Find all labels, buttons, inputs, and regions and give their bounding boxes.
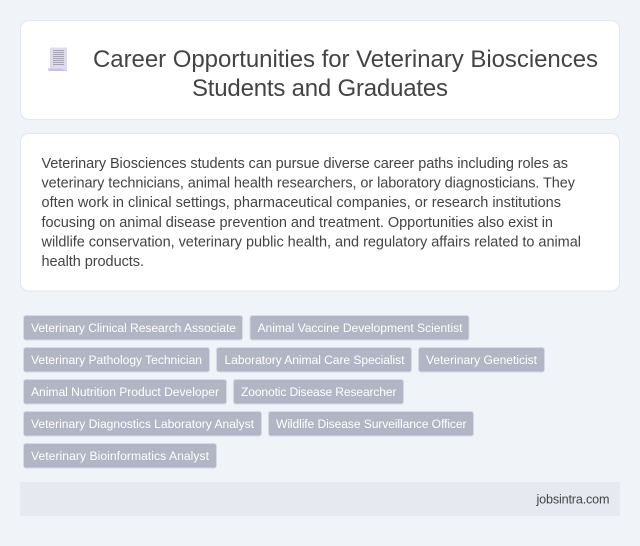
description text: often work in clinical settings, pharmaceutical companies, or research institutions bbox=[42, 195, 561, 211]
tag: Animal Vaccine Development Scientist: Animal Vaccine Development Scientist bbox=[258, 321, 463, 335]
tag: Veterinary Diagnostics Laboratory Analyst bbox=[24, 412, 262, 436]
description text: veterinary technicians, animal health researchers, or laboratory diagnosticians. They bbox=[42, 176, 576, 192]
description text: focusing on animal disease prevention and treatment. Opportunities also exist in bbox=[42, 215, 553, 231]
tag: Veterinary Bioinformatics Analyst: Veterinary Bioinformatics Analyst bbox=[31, 449, 210, 463]
tag: Animal Nutrition Product Developer: Animal Nutrition Product Developer bbox=[31, 385, 219, 399]
tag: Veterinary Geneticist bbox=[418, 348, 544, 372]
description text: health products. bbox=[42, 254, 144, 270]
panel: description bbox=[20, 134, 620, 291]
title bbox=[93, 46, 598, 102]
tag: Wildlife Disease Surveillance Officer: Wildlife Disease Surveillance Officer bbox=[276, 417, 466, 431]
tag: Veterinary Clinical Research Associate bbox=[24, 316, 242, 340]
tag: Animal Nutrition Product Developer bbox=[24, 380, 226, 404]
description text: wildlife conservation, veterinary public health, and regulatory affairs related to animal bbox=[40, 234, 581, 250]
panel: header bbox=[20, 20, 620, 120]
tag: Zoonotic Disease Researcher bbox=[234, 380, 404, 404]
tag: Animal Vaccine Development Scientist bbox=[250, 316, 469, 340]
tag: Laboratory Animal Care Specialist bbox=[216, 348, 412, 372]
description text: Veterinary Biosciences students can pursue diverse career paths including roles as bbox=[42, 156, 568, 172]
footer credit: jobsintra.com bbox=[536, 492, 610, 506]
tag: Veterinary Pathology Technician bbox=[24, 348, 210, 372]
tag: Zoonotic Disease Researcher: Zoonotic Disease Researcher bbox=[241, 385, 396, 399]
tag: Veterinary Geneticist: Veterinary Geneticist bbox=[426, 353, 538, 367]
tag: Laboratory Animal Care Specialist: Laboratory Animal Care Specialist bbox=[224, 353, 405, 367]
title: Students and Graduates bbox=[192, 75, 448, 102]
tag: Wildlife Disease Surveillance Officer bbox=[268, 412, 474, 436]
description text bbox=[40, 156, 581, 270]
footer bbox=[20, 482, 620, 516]
tag: Veterinary Pathology Technician: Veterinary Pathology Technician bbox=[31, 353, 202, 367]
tag: Veterinary Diagnostics Laboratory Analyst: Veterinary Diagnostics Laboratory Analyst bbox=[31, 417, 255, 431]
tag: Veterinary Clinical Research Associate: Veterinary Clinical Research Associate bbox=[31, 321, 236, 335]
tag: Veterinary Bioinformatics Analyst bbox=[24, 444, 216, 468]
icon: scroll document bbox=[48, 48, 67, 71]
title: Career Opportunities for Veterinary Biosciences bbox=[93, 46, 598, 73]
tag list bbox=[24, 316, 544, 468]
